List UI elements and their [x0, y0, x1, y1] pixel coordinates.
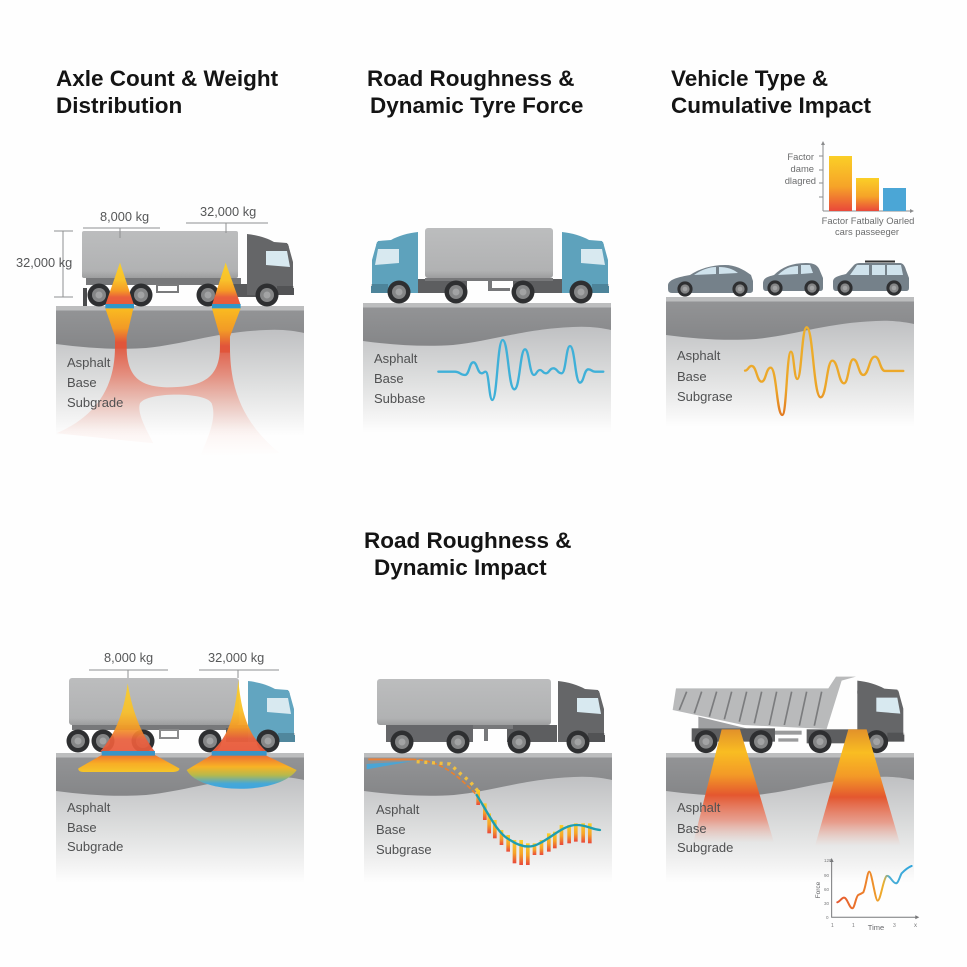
truck: double-cab blue	[371, 228, 609, 304]
layer labels: Base	[374, 371, 404, 386]
layer labels: Asphalt	[677, 800, 720, 815]
layer labels: Subgrase	[376, 842, 432, 857]
line chart: force over time: Force	[815, 881, 822, 898]
truck: grey semi-trailer	[377, 679, 605, 754]
weight dimension labels: 32,000 kg	[208, 650, 264, 665]
road cross-section layers	[363, 303, 611, 434]
line chart: force over time: x	[914, 923, 917, 929]
heading: dynamic tyre force: Dynamic Tyre Force	[370, 93, 583, 118]
bar chart: damage factor	[785, 141, 914, 237]
heading: cumulative impact: Cumulative Impact	[671, 93, 872, 118]
truck: grey semi-trailer	[82, 231, 294, 306]
layer labels: Base	[376, 822, 406, 837]
heading: dynamic tyre force: Road Roughness &	[367, 66, 575, 91]
road cross-section layers	[56, 753, 304, 884]
heading: road roughness and dynamic impact: Dynamic Impact	[374, 555, 547, 580]
bar chart: damage factor: cars passeeger	[835, 226, 899, 237]
layer labels: Subgrase	[677, 389, 733, 404]
vehicle: SUV	[833, 260, 909, 296]
weight dimension labels: 8,000 kg	[104, 650, 153, 665]
line chart: force over time: 30	[824, 901, 830, 906]
truck: grey trailer blue cab	[66, 678, 295, 752]
heading: road roughness and dynamic impact: Road Roughness &	[364, 528, 572, 553]
heading: axle count: Distribution	[56, 93, 182, 118]
weight dimension labels	[16, 204, 268, 297]
panel: road roughness and dynamic tyre force	[363, 66, 611, 434]
heading: axle count: Axle Count & Weight	[56, 66, 278, 91]
line chart: force over time: 1	[831, 923, 834, 929]
truck: dump truck	[673, 677, 904, 753]
layer labels: Asphalt	[67, 355, 110, 370]
bar chart: damage factor: Factor	[787, 151, 814, 162]
heading: cumulative impact: Vehicle Type &	[671, 66, 828, 91]
road cross-section layers	[56, 306, 304, 437]
layer labels: Base	[677, 369, 707, 384]
load spread beams	[693, 729, 901, 846]
weight dimension labels: 8,000 kg	[100, 209, 149, 224]
line chart: force over time: 60	[824, 887, 830, 892]
road cross-section layers	[666, 753, 914, 884]
line chart: force over time: 90	[824, 873, 830, 878]
line chart: force over time: 1	[852, 923, 855, 929]
line chart: force over time: 0	[826, 915, 829, 920]
layer labels: Subbase	[374, 391, 425, 406]
panel: deflection curve	[364, 679, 612, 884]
road cross-section layers	[364, 753, 612, 884]
layer labels: Subgrade	[677, 840, 733, 855]
stress flare through subgrade	[57, 347, 280, 457]
weight dimension labels: 32,000 kg	[16, 255, 72, 270]
deflection bars and curve	[367, 759, 600, 865]
weight dimension labels	[89, 650, 279, 678]
road cross-section layers	[666, 297, 914, 428]
layer labels: Asphalt	[67, 800, 110, 815]
line chart: force over time	[815, 858, 919, 932]
stress cones under axles	[105, 263, 241, 353]
bar chart: damage factor: dlagred	[785, 175, 816, 186]
vehicle: compact car	[763, 263, 823, 296]
layer labels: Subgrade	[67, 839, 123, 854]
line chart: force over time: 120	[824, 858, 832, 863]
line chart: force over time: 3	[893, 923, 896, 929]
panel: axle load pressure bulbs	[56, 650, 304, 884]
panel: vehicle type and cumulative impact	[666, 66, 914, 428]
layer labels: Base	[677, 821, 707, 836]
orange force wave	[745, 327, 903, 415]
layer labels: Asphalt	[374, 351, 417, 366]
layer labels: Base	[67, 375, 97, 390]
layer labels: Base	[67, 820, 97, 835]
bar chart: damage factor: dame	[791, 163, 814, 174]
weight dimension labels: 32,000 kg	[200, 204, 256, 219]
line chart: force over time: Time	[868, 923, 884, 932]
pressure cones and bulbs	[78, 680, 297, 789]
panel: axle count and weight distribution	[16, 66, 304, 457]
vehicle: hatchback	[668, 265, 753, 297]
bar chart: damage factor: Factor Fatbally Oarled	[822, 215, 914, 226]
layer labels: Subgrade	[67, 395, 123, 410]
layer labels: Asphalt	[677, 348, 720, 363]
panel: dump truck load spread	[666, 677, 919, 932]
layer labels: Asphalt	[376, 802, 419, 817]
blue force wave	[438, 340, 603, 400]
